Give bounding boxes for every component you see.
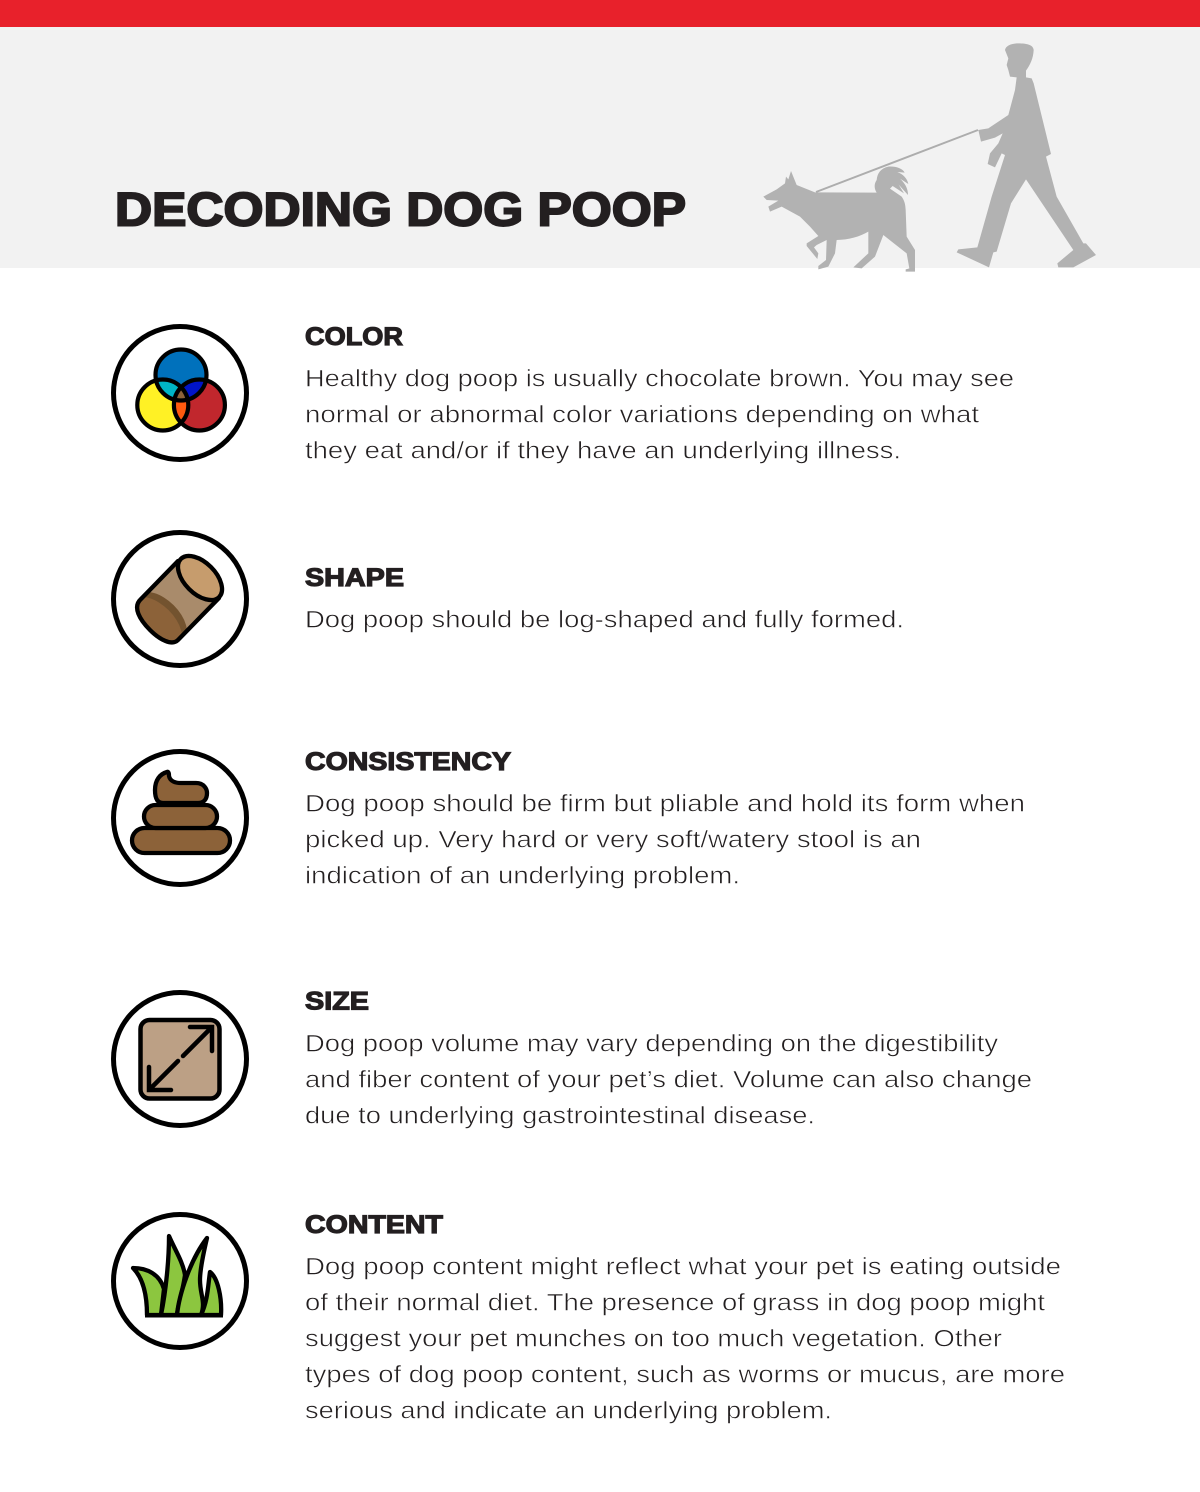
text block: content: serious and indicate an underlying problem. <box>305 1398 832 1424</box>
heading: consistency: CONSISTENCY <box>305 748 511 776</box>
heading: size: SIZE <box>305 988 369 1016</box>
text block: consistency <box>305 790 1025 890</box>
text block: size: and fiber content of your pet’s diet. Volume can also change <box>305 1066 1032 1094</box>
illustration: person walking dog <box>763 43 1096 272</box>
text block: color <box>305 366 1014 464</box>
icon: grass <box>114 1214 246 1348</box>
header band <box>0 27 1200 268</box>
heading: shape: SHAPE <box>305 564 404 592</box>
top red bar <box>0 0 1200 27</box>
text block: consistency: Dog poop should be firm but pliable and hold its form when <box>305 790 1025 818</box>
text block: content: Dog poop content might reflect what your pet is eating outside <box>305 1254 1061 1280</box>
text block: color: Healthy dog poop is usually chocolate brown. You may see <box>305 366 1014 392</box>
text block: size: due to underlying gastrointestinal disease. <box>305 1102 815 1130</box>
leash <box>816 130 978 192</box>
text block: content: of their normal diet. The presence of grass in dog poop might <box>305 1290 1045 1316</box>
icon: log shape <box>114 532 246 666</box>
text block: size: Dog poop volume may vary depending on the digestibility <box>305 1030 999 1058</box>
text block: color: normal or abnormal color variations depending on what <box>305 402 979 428</box>
icon: size arrows <box>114 992 246 1126</box>
icon: color circles <box>114 326 246 460</box>
heading: content: CONTENT <box>305 1211 443 1239</box>
text block: content: suggest your pet munches on too much vegetation. Other <box>305 1326 1002 1352</box>
person silhouette <box>957 43 1096 267</box>
text block: content: types of dog poop content, such as worms or mucus, are more <box>305 1362 1065 1388</box>
heading: color: COLOR <box>305 323 403 351</box>
text block: content <box>305 1254 1065 1424</box>
text block: consistency: indication of an underlying problem. <box>305 862 740 890</box>
text block: shape: Dog poop should be log-shaped and fully formed. <box>305 606 904 634</box>
text block: consistency: picked up. Very hard or very soft/watery stool is an <box>305 826 921 854</box>
title: DECODING DOG POOP <box>115 182 686 235</box>
text block: color: they eat and/or if they have an underlying illness. <box>305 438 901 464</box>
icon: poop <box>114 752 246 884</box>
dog silhouette <box>763 167 915 272</box>
text block: size <box>305 1030 1032 1130</box>
